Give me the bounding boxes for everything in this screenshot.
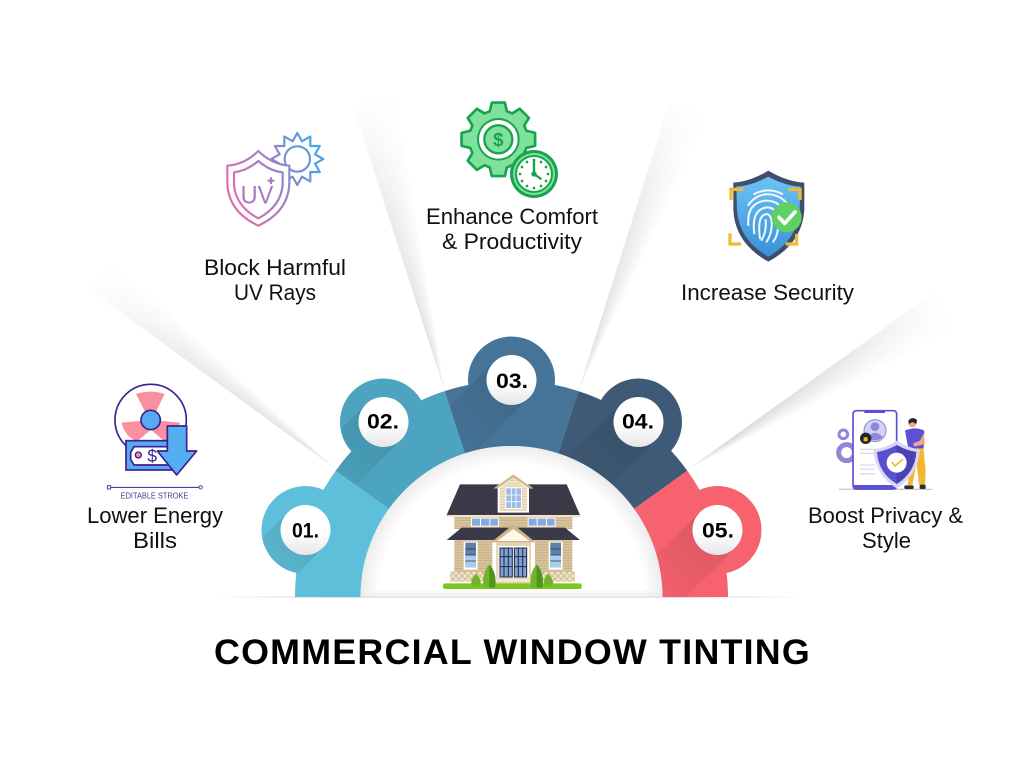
segment 05: 05. [702,520,734,542]
icon: energy bill: $ [147,446,157,466]
light ray 1 [83,257,337,470]
label: enhance comfort and productivity: & Productivity [442,229,583,254]
label: increase security: Increase Security [681,280,855,305]
label: boost privacy and style: Boost Privacy & [808,503,963,528]
lower wall [454,540,572,572]
semicircle diagram [262,336,762,597]
label: lower energy bills: Lower Energy [87,503,224,528]
upper roof [447,484,580,515]
icon: gear and clock [462,103,558,198]
segment 04 [558,378,688,509]
segment 03: 03. [496,370,528,393]
grass [443,583,582,589]
label: boost privacy and style: Style [862,528,911,553]
porch [492,541,496,580]
icon: energy bill [107,384,202,501]
segment 02 [336,378,465,509]
lattice [450,572,485,582]
label: lower energy bills: Bills [133,528,177,553]
segment 01: 01. [292,520,319,542]
light ray 4 [687,290,963,470]
inner arch [360,446,662,597]
icon: energy bill: EDITABLE STROKE [121,492,188,501]
lower roof [447,528,580,540]
segment 04: 04. [622,410,654,434]
icon: UV shield and sun [227,133,323,226]
light ray 2 [350,87,445,392]
ground line [215,596,805,598]
icon: house [443,474,582,589]
dormer [494,474,533,513]
segment 02: 02. [367,410,399,434]
icon: fingerprint shield [730,171,804,262]
light ray 3 [578,100,715,392]
label: enhance comfort and productivity: Enhance Comfort [426,204,599,229]
bushes [483,564,496,588]
icon: privacy phone with person [839,411,932,489]
steps [494,579,532,582]
label: block harmful uv rays: UV Rays [234,280,316,305]
icon: gear and clock: $ [493,129,504,150]
segment 01 [262,470,389,597]
icon: UV shield and sun: UV [241,182,274,209]
segment 05 [634,470,762,597]
label: block harmful uv rays: Block Harmful [204,255,346,280]
segment 03 [444,336,578,454]
title: COMMERCIAL WINDOW TINTING [214,633,811,672]
